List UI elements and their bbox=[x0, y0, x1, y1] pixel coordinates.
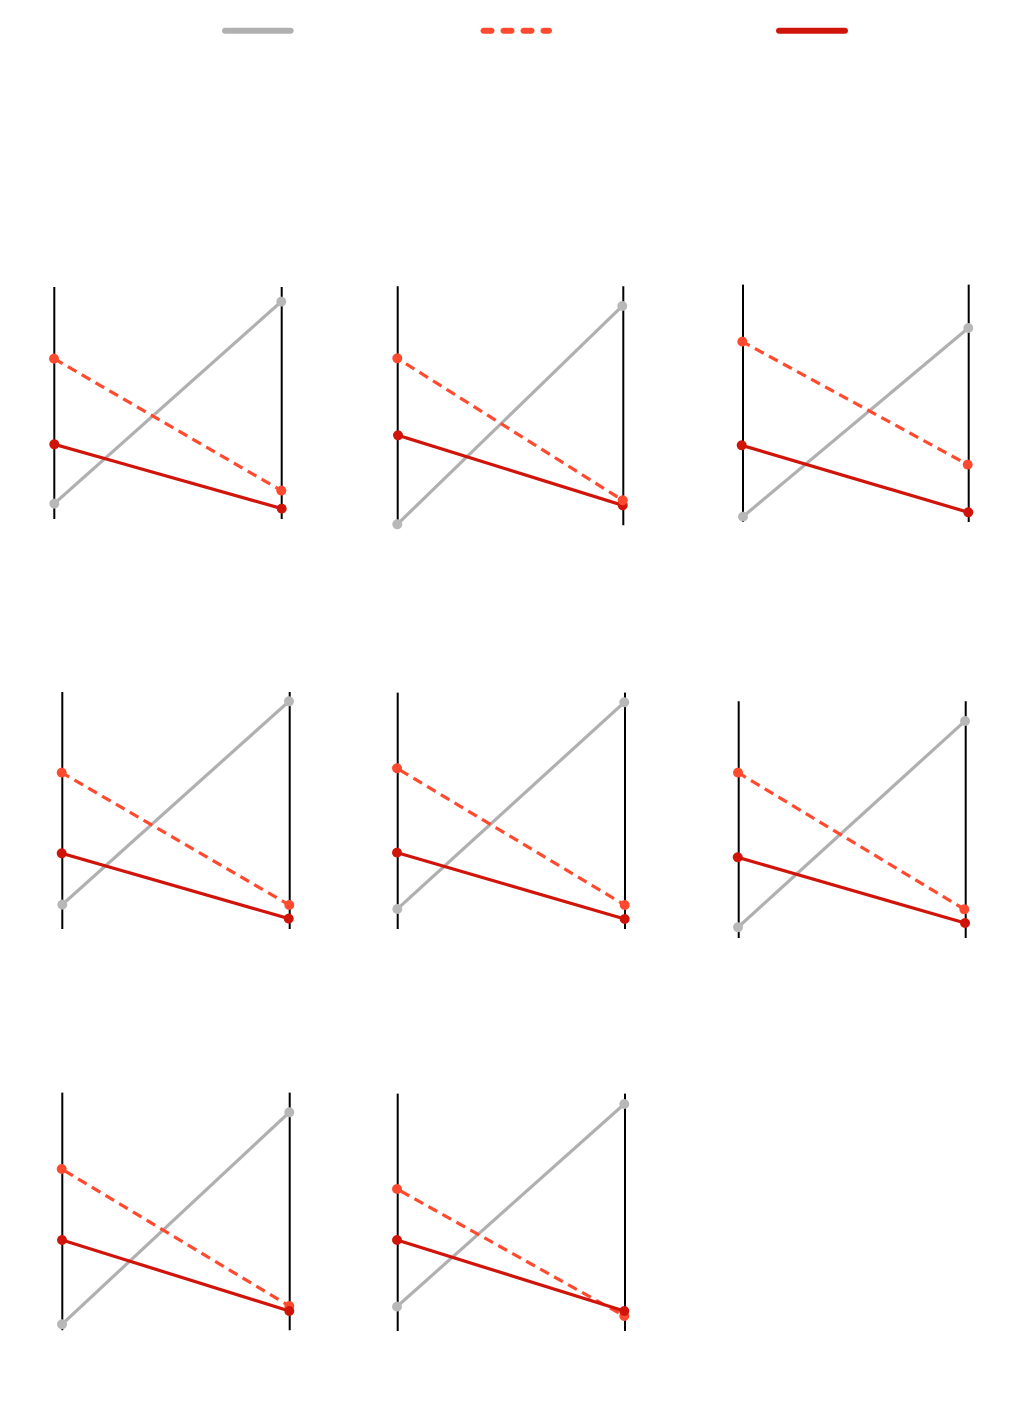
legend bbox=[225, 28, 845, 34]
panel: row 1 chart 1 bbox=[49, 287, 287, 519]
panel: row 3 chart 2 bbox=[392, 1094, 629, 1331]
panel: row 2 chart 3 bbox=[733, 701, 970, 938]
panel: row 2 chart 2 bbox=[392, 693, 630, 929]
panel: row 1 chart 3 bbox=[737, 285, 973, 522]
panel: row 1 chart 2 bbox=[392, 286, 628, 529]
panel: row 3 chart 1 bbox=[57, 1093, 294, 1330]
panel: row 2 chart 1 bbox=[57, 692, 294, 929]
